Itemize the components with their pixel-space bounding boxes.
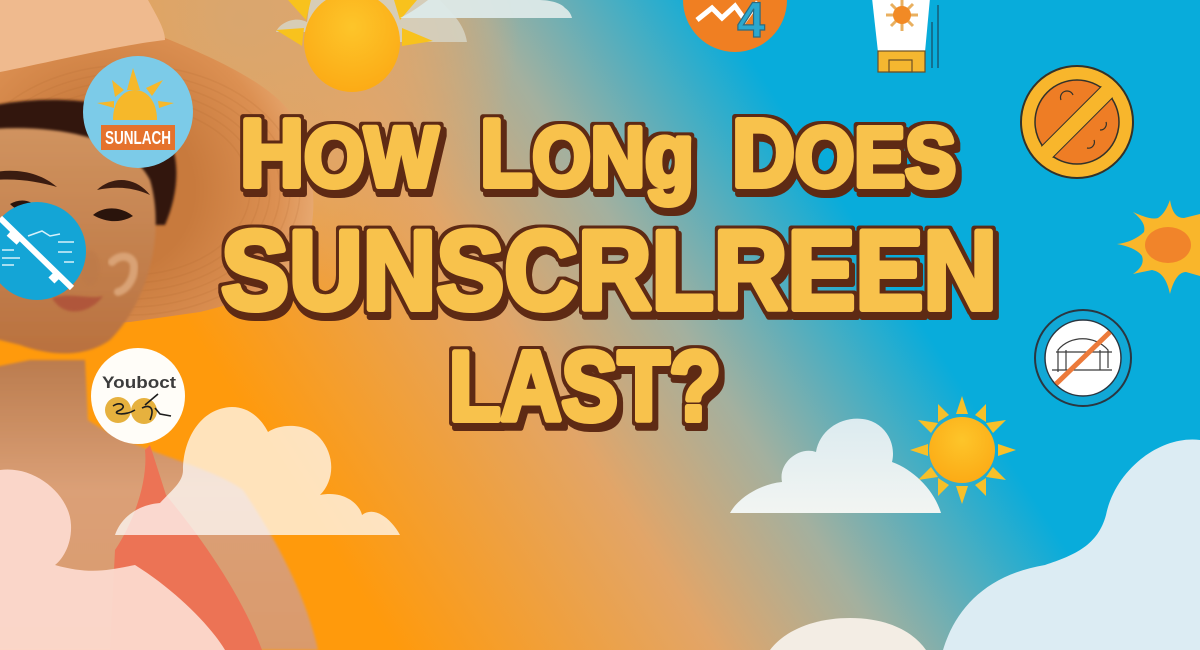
cloud: bottom left pink (0, 469, 225, 650)
title line 1: HOW (240, 100, 439, 207)
icon: top sun (276, 0, 433, 92)
sunscreen smear (112, 257, 134, 292)
nose shadow (80, 250, 100, 286)
cloud: behind top sun (276, 0, 467, 42)
hat brim (0, 35, 313, 330)
title line 3: LAST? (449, 331, 721, 441)
face (0, 128, 156, 353)
cloud: left centre translucent (115, 407, 400, 535)
title (221, 100, 997, 441)
cloud: right centre (730, 419, 941, 513)
body: neck and shoulders (0, 360, 318, 650)
badge: Sunlach: SUNLACH (105, 128, 171, 148)
eyes (10, 201, 133, 221)
icon: no beach-hut sign (1035, 310, 1131, 406)
badge: Sunlach (83, 56, 193, 168)
title: DOES (732, 100, 956, 207)
eyebrows (0, 171, 150, 195)
title: LONg (480, 100, 694, 207)
lips (52, 296, 103, 311)
cloud: top centre (400, 0, 572, 18)
dress (110, 445, 262, 650)
icon: right sun (910, 396, 1016, 504)
badge: Youboct: Youboct (102, 373, 176, 392)
cloud: bottom right (943, 440, 1200, 650)
hat crown (0, 0, 165, 72)
hair (0, 100, 176, 225)
cloud: bottom centre (770, 618, 926, 650)
badge: blue tool (0, 202, 86, 300)
icon: sunscreen tube (872, 0, 938, 72)
photo: woman in sun hat (0, 0, 318, 650)
icon: spiky orange sun (1117, 200, 1200, 294)
title line 2: SUNSCRLREEN (221, 208, 997, 333)
icon: prohibited sun sign (1021, 66, 1133, 178)
badge: Youboct (91, 348, 185, 444)
icon: orange chart badge (683, 0, 787, 52)
